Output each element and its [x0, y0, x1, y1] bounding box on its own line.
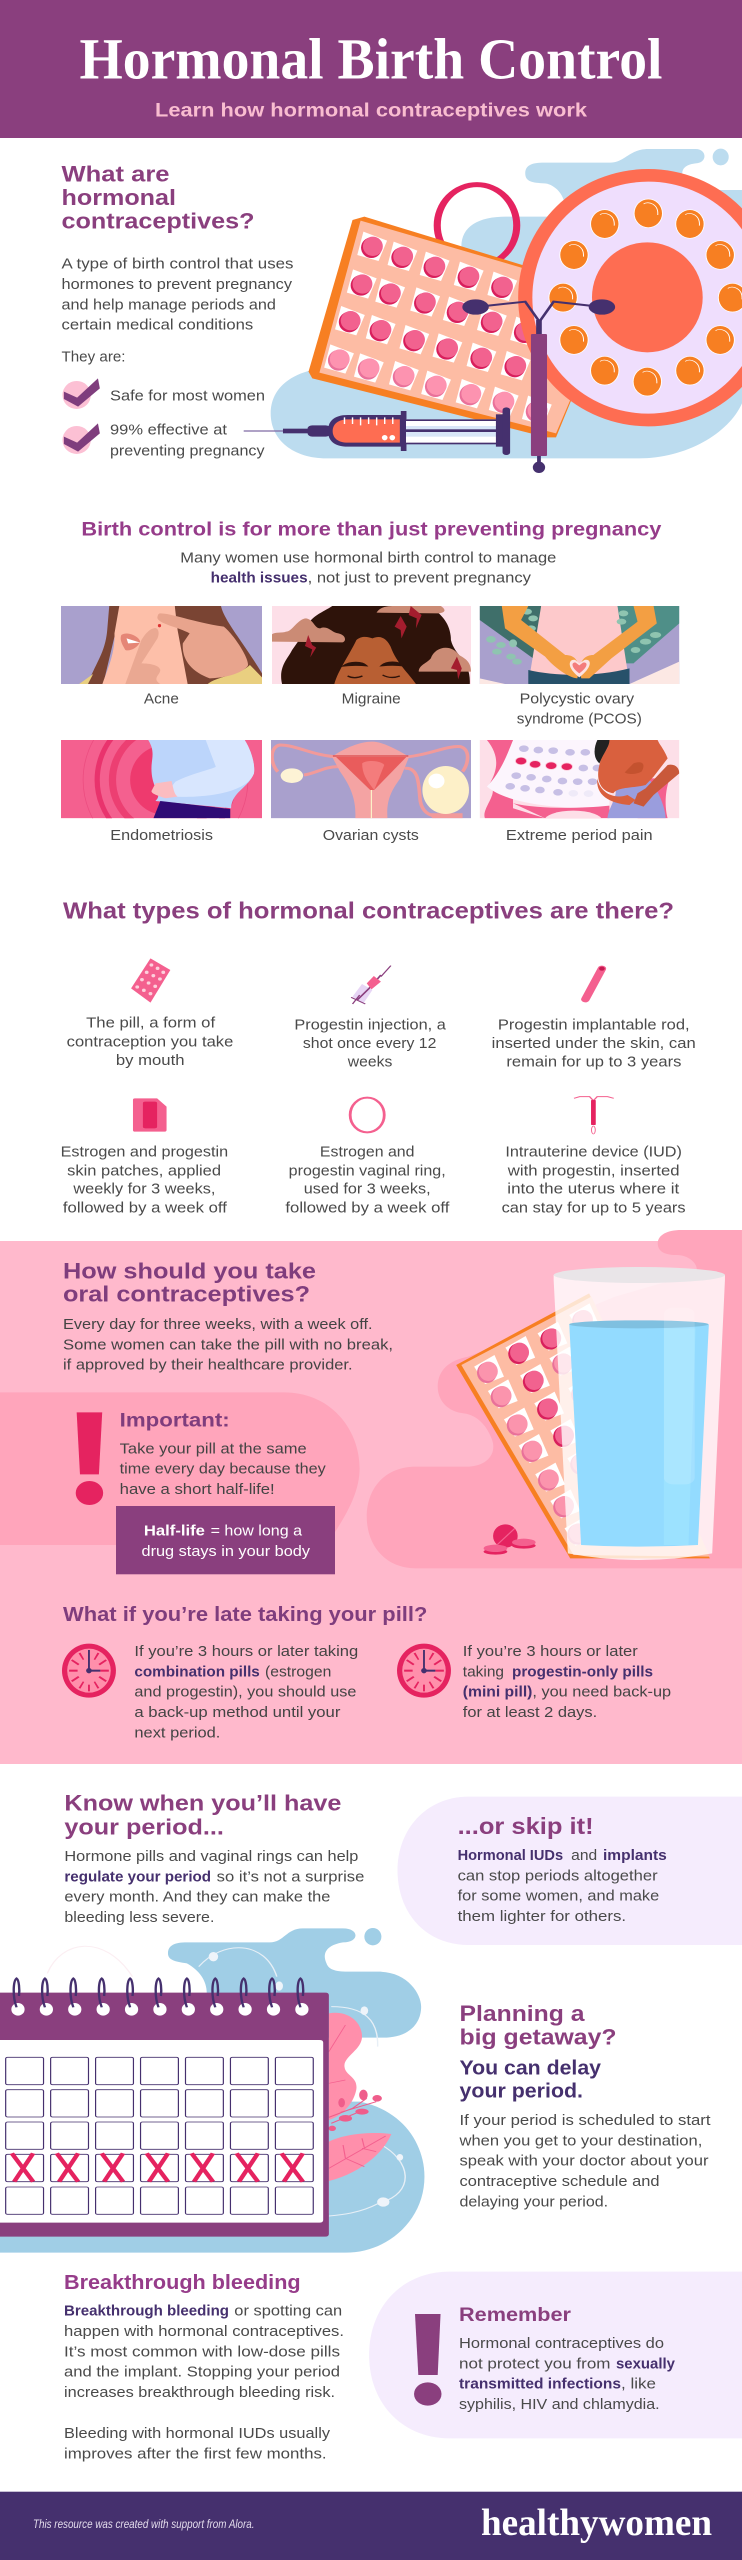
- image: migraine: [272, 606, 471, 684]
- label: PCOS: Polycystic ovary: [520, 691, 635, 707]
- body text: contraceptive schedule and: [460, 2174, 660, 2190]
- callout: half-life: Half-life: [144, 1524, 205, 1540]
- icon: IUD: [574, 1097, 614, 1134]
- body text: or spotting can: [234, 2304, 342, 2320]
- text: patches: weekly for 3 weeks,: [72, 1182, 215, 1198]
- icon: exclamation: [76, 1412, 103, 1505]
- body text: Hormonal contraceptives do: [459, 2336, 664, 2352]
- illustration: calendar: [0, 1928, 424, 2253]
- intro text: [62, 256, 294, 366]
- benefit: safe: Safe for most women: [110, 389, 265, 405]
- image: ovarian cysts: [271, 740, 471, 818]
- panel: how to take oral contraceptives: [0, 1230, 742, 1764]
- body text: Hormone pills and vaginal rings can help: [64, 1849, 358, 1865]
- body text: transmitted infections: [459, 2377, 621, 2393]
- intro text: health issues: [211, 571, 308, 587]
- panel: planning a big getaway: big getaway?: [460, 2024, 616, 2049]
- background blobs: [0, 1230, 742, 1568]
- text: ring: used for 3 weeks,: [304, 1182, 431, 1198]
- body text: It’s most common with low-dose pills: [64, 2344, 340, 2360]
- text: patches: followed by a week off: [63, 1200, 228, 1216]
- text: progestin-only pills: , you need back-up: [532, 1685, 671, 1701]
- label: migraine: Migraine: [342, 691, 401, 707]
- text: combination pills: next period.: [134, 1725, 220, 1741]
- subheading: late pill: What if you’re late taking your pill?: [63, 1604, 427, 1626]
- footer: [0, 2492, 742, 2560]
- text: IUD: Intrauterine device (IUD): [505, 1145, 682, 1161]
- text: the pill: by mouth: [116, 1053, 184, 1069]
- important note: have a short half-life!: [120, 1482, 275, 1498]
- body text: not protect you from: [459, 2356, 610, 2372]
- subheading: You can delay: [460, 2058, 602, 2080]
- icon: patch: [133, 1098, 167, 1132]
- subheading: your period.: [460, 2081, 583, 2103]
- important note: [120, 1410, 327, 1498]
- panel: or skip it: Hormonal IUDs: [458, 1848, 563, 1864]
- body text: sexually: [616, 2356, 675, 2372]
- text: patches: [61, 1145, 228, 1216]
- body text: [459, 2336, 675, 2413]
- text: the pill: The pill, a form of: [86, 1016, 216, 1032]
- panel: or skip it: and: [571, 1848, 597, 1864]
- panel: what are hormonal contraceptives: [62, 149, 742, 473]
- panel: or skip it: them lighter for others.: [458, 1909, 626, 1925]
- title: Hormonal Birth Control: [80, 26, 662, 91]
- illustration: pill pack, ring, IUD, syringe: [244, 149, 742, 473]
- body text: [64, 2304, 344, 2462]
- panel: more than preventing pregnancy: [61, 519, 679, 862]
- body text: Bleeding with hormonal IUDs usually: [64, 2426, 331, 2442]
- text: injection: Progestin injection, a: [294, 1017, 447, 1033]
- body text: so it’s not a surprise: [217, 1869, 364, 1885]
- text: combination pills: [134, 1644, 358, 1741]
- image: extreme period pain: [480, 740, 680, 818]
- text: progestin-only pills: If you’re 3 hours or later: [463, 1644, 638, 1660]
- text: ring: [285, 1145, 451, 1216]
- icon: clock 2: [397, 1644, 451, 1698]
- image: PCOS: [480, 606, 680, 684]
- icon: exclamation: [414, 2314, 441, 2406]
- intro text: hormones to prevent pregnancy: [62, 277, 293, 293]
- intro text: Many women use hormonal birth control to manage: [180, 551, 556, 567]
- body text: and the implant. Stopping your period: [64, 2365, 340, 2381]
- heading: What types of hormonal contraceptives are there?: [63, 897, 674, 923]
- intro text: and help manage periods and: [62, 297, 276, 313]
- subtitle: Learn how hormonal contraceptives work: [155, 100, 587, 122]
- callout: half-life: = how long a: [211, 1524, 303, 1540]
- subheading: [460, 2058, 602, 2103]
- label: ovarian cysts: Ovarian cysts: [323, 828, 419, 844]
- panel: know when you'll have your period: [64, 1791, 364, 1926]
- text: implant: inserted under the skin, can: [492, 1036, 696, 1052]
- icon: check 1: [62, 378, 100, 409]
- panel: or skip it: for some women, and make: [458, 1889, 659, 1905]
- icon: pill pack: [131, 958, 170, 1003]
- label: PCOS: [517, 691, 642, 728]
- body text: Every day for three weeks, with a week off.: [63, 1317, 372, 1333]
- heading: [63, 1258, 316, 1307]
- text: combination pills: combination pills: [134, 1664, 260, 1680]
- important note: Important:: [120, 1410, 230, 1432]
- body text: increases breakthrough bleeding risk.: [64, 2385, 335, 2401]
- body text: every month. And they can make the: [64, 1890, 330, 1906]
- image: acne: [61, 606, 262, 684]
- important note: Take your pill at the same: [120, 1441, 307, 1457]
- panel: or skip it: [397, 1797, 742, 1945]
- text: IUD: [502, 1145, 686, 1216]
- benefit: effective: 99% effective at: [110, 423, 227, 439]
- text: ring: followed by a week off: [285, 1200, 451, 1216]
- heading: contraceptives?: [62, 208, 254, 234]
- benefit: effective: preventing pregnancy: [110, 443, 265, 459]
- label: endometriosis: Endometriosis: [110, 828, 213, 844]
- text: progestin-only pills: for at least 2 days.: [463, 1705, 597, 1721]
- body text: , like: [621, 2377, 656, 2393]
- benefit: effective: [110, 423, 265, 459]
- callout: half-life: drug stays in your body: [142, 1544, 311, 1560]
- text: patches: Estrogen and progestin: [61, 1145, 228, 1161]
- important note: time every day because they: [120, 1462, 327, 1478]
- panel: or skip it: ...or skip it!: [458, 1813, 594, 1839]
- header band: [0, 0, 742, 138]
- text: IUD: can stay for up to 5 years: [502, 1200, 686, 1216]
- heading: hormonal: [62, 185, 176, 210]
- body text: [458, 2113, 710, 2210]
- text: combination pills: and progestin), you should use: [134, 1685, 356, 1701]
- icon: vaginal ring: [350, 1098, 384, 1132]
- body text: when you get to your destination,: [458, 2133, 702, 2149]
- intro text: , not just to prevent pregnancy: [308, 571, 532, 587]
- body text: if approved by their healthcare provider.: [63, 1358, 353, 1374]
- body text: [64, 1849, 364, 1926]
- body text: regulate your period: [64, 1869, 211, 1885]
- text: progestin-only pills: (mini pill): [463, 1685, 533, 1701]
- body text: syphilis, HIV and chlamydia.: [459, 2397, 660, 2413]
- text: IUD: with progestin, inserted: [507, 1163, 680, 1179]
- icon: clock 1: [62, 1644, 116, 1698]
- callout: half-life: [116, 1506, 335, 1574]
- icon: syringe: [351, 966, 391, 1004]
- intro text: They are:: [62, 350, 126, 366]
- image: endometriosis: [61, 740, 262, 818]
- body text: If your period is scheduled to start: [460, 2113, 710, 2129]
- label: extreme period pain: Extreme period pain: [506, 828, 653, 844]
- text: IUD: into the uterus where it: [507, 1182, 679, 1198]
- label: PCOS: syndrome (PCOS): [517, 712, 642, 728]
- body text: Breakthrough bleeding: [64, 2304, 229, 2320]
- text: progestin-only pills: [463, 1644, 671, 1721]
- heading: How should you take: [63, 1258, 316, 1283]
- panel: types of contraceptives: [61, 897, 696, 1216]
- text: combination pills: If you’re 3 hours or later taking: [134, 1644, 358, 1660]
- panel: breakthrough bleeding: [64, 2272, 344, 2462]
- body text: speak with your doctor about your: [460, 2154, 709, 2170]
- heading: What are: [62, 162, 170, 187]
- icon: implant rod: [585, 967, 605, 999]
- text: injection: [294, 1017, 447, 1071]
- text: implant: Progestin implantable rod,: [498, 1017, 690, 1033]
- text: combination pills: a back-up method until your: [134, 1705, 341, 1721]
- body text: delaying your period.: [460, 2194, 608, 2210]
- body text: [63, 1317, 393, 1374]
- text: ring: Estrogen and: [320, 1145, 414, 1161]
- body text: improves after the first few months.: [64, 2446, 327, 2462]
- heading: Birth control is for more than just preventing pregnancy: [81, 519, 662, 541]
- heading: [64, 1791, 341, 1839]
- icon: check 2: [62, 423, 100, 454]
- credit: This resource was created with support from Alora.: [33, 2517, 254, 2531]
- body text: happen with hormonal contraceptives.: [64, 2324, 344, 2340]
- panel: or skip it: can stop periods altogether: [458, 1868, 658, 1884]
- text: the pill: [67, 1016, 233, 1069]
- heading: your period...: [64, 1814, 224, 1839]
- heading: Know when you’ll have: [64, 1791, 341, 1816]
- panel: or skip it: implants: [603, 1848, 667, 1864]
- text: ring: progestin vaginal ring,: [289, 1163, 446, 1179]
- intro text: certain medical conditions: [62, 318, 253, 334]
- text: injection: weeks: [347, 1055, 392, 1071]
- intro text: [180, 551, 556, 587]
- label: acne: Acne: [144, 691, 179, 707]
- heading: [62, 162, 254, 234]
- heading: Remember: [459, 2305, 572, 2326]
- text: combination pills: (estrogen: [265, 1664, 331, 1680]
- text: implant: remain for up to 3 years: [506, 1055, 681, 1071]
- body text: Some women can take the pill with no break,: [63, 1337, 393, 1353]
- text: the pill: contraception you take: [67, 1034, 233, 1050]
- illustration: pill pack and glass of water: [456, 1267, 725, 1560]
- logo: healthywomen: [481, 2502, 712, 2544]
- text: patches: skin patches, applied: [67, 1163, 221, 1179]
- panel: remember: [369, 2272, 742, 2438]
- text: progestin-only pills: taking: [463, 1664, 504, 1680]
- heading: oral contraceptives?: [63, 1282, 310, 1307]
- intro text: A type of birth control that uses: [62, 256, 294, 272]
- text: progestin-only pills: progestin-only pills: [512, 1664, 653, 1680]
- text: implant: [492, 1017, 696, 1071]
- panel: planning a big getaway: [458, 2001, 710, 2210]
- panel: breakthrough bleeding: Breakthrough bleeding: [64, 2272, 301, 2294]
- body text: bleeding less severe.: [64, 1910, 214, 1926]
- panel: planning a big getaway: Planning a: [460, 2001, 585, 2026]
- text: injection: shot once every 12: [303, 1036, 436, 1052]
